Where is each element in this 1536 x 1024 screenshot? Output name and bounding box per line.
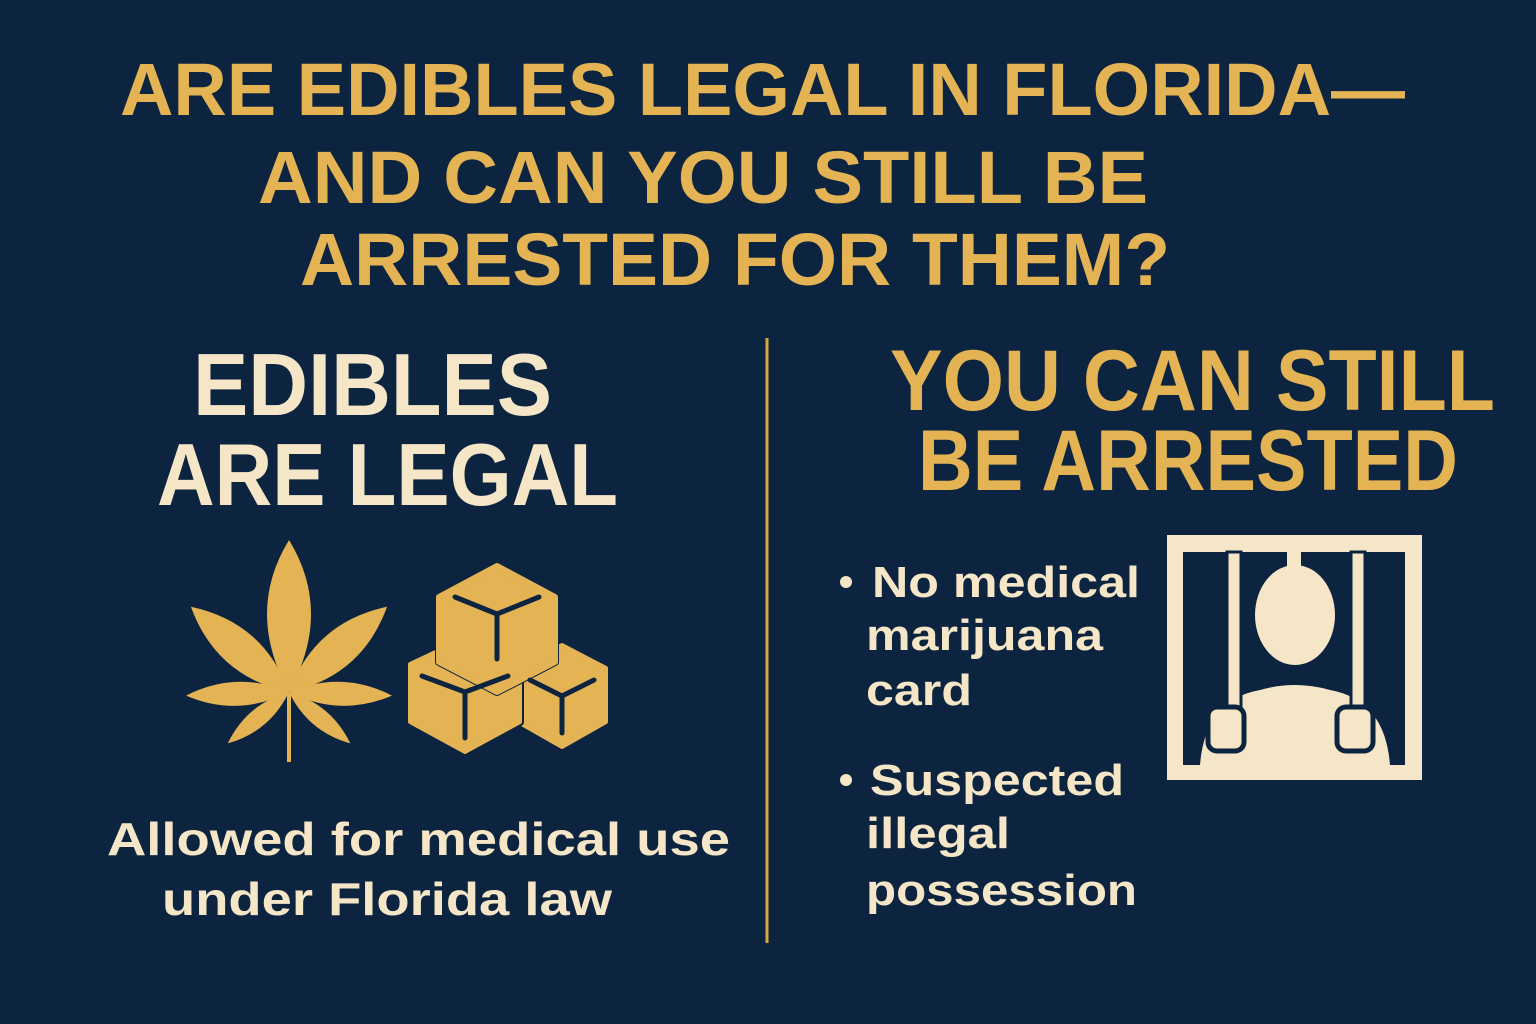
bullet list: possession [866, 866, 1137, 915]
bullet list: Suspected [870, 756, 1124, 805]
left caption: under Florida law [162, 873, 612, 925]
right heading: YOU CAN STILL [890, 333, 1495, 429]
bullet list: illegal [866, 809, 1010, 858]
bullet list: marijuana [866, 611, 1104, 660]
left heading: ARE LEGAL [157, 425, 618, 524]
icon: edible cubes [410, 566, 606, 752]
icon: cannabis leaf [179, 540, 399, 762]
right heading [890, 333, 1495, 509]
left caption [107, 813, 730, 925]
left heading: EDIBLES [193, 335, 552, 434]
right heading: BE ARRESTED [918, 413, 1458, 509]
title: AND CAN YOU STILL BE [258, 136, 1148, 219]
bullet list: card [866, 666, 972, 715]
left caption: Allowed for medical use [107, 813, 730, 865]
divider [766, 338, 768, 943]
title [120, 48, 1405, 301]
left heading [157, 335, 618, 524]
title: ARRESTED FOR THEM? [300, 218, 1170, 301]
bullet list: No medical [872, 558, 1140, 607]
title: ARE EDIBLES LEGAL IN FLORIDA— [120, 48, 1405, 131]
icon: jail [1167, 535, 1422, 780]
bullet list [840, 558, 1140, 915]
